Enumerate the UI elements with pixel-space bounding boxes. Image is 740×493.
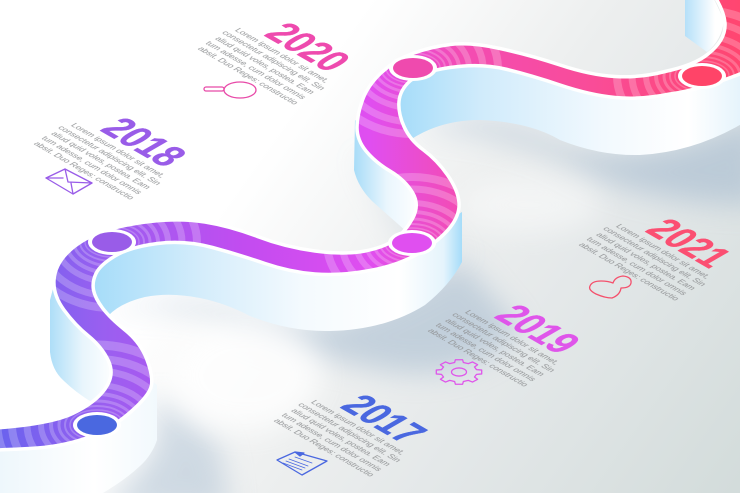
- body text 2018: absit. Duo Reges: constructio: [31, 140, 137, 201]
- body text 2019: [424, 306, 567, 389]
- wall: inner curve below 2018: [50, 285, 116, 403]
- body text 2017: tum adesse, cum dolor omnis: [279, 411, 385, 473]
- body text 2021: consectetur adipiscing elit. Sin: [601, 225, 709, 288]
- node 2017: [73, 412, 121, 438]
- wall: front left section: [0, 380, 157, 493]
- icon: document: [277, 452, 327, 475]
- body text 2017: [270, 396, 413, 479]
- node 2019: [388, 230, 436, 256]
- year 2018: 2018: [91, 111, 197, 173]
- icon: magnifier: [204, 82, 256, 98]
- icon: person: [590, 276, 631, 298]
- icon: gear: [436, 360, 482, 384]
- body text 2017: absit. Duo Reges: constructio: [271, 417, 377, 478]
- wall: inner curve below 2020: [354, 120, 422, 232]
- body text 2017: aliud quid voles, postea. Eam: [289, 407, 394, 468]
- body text 2019: consectetur adipiscing elit. Sin: [450, 311, 558, 374]
- body text 2018: tum adesse, cum dolor omnis: [39, 134, 145, 196]
- milestone 2017 text: [270, 375, 448, 479]
- body text 2021: aliud quid voles, postea. Eam: [594, 231, 699, 292]
- body text 2021: absit. Duo Reges: constructio: [576, 241, 682, 302]
- floor shadows: [100, 115, 740, 493]
- body text 2021: tum adesse, cum dolor omnis: [584, 235, 690, 297]
- body text 2018: consectetur adipiscing elit. Sin: [56, 124, 164, 187]
- body text 2017: Lorem ipsum dolor sit amet,: [309, 398, 408, 456]
- body text 2018: aliud quid voles, postea. Eam: [49, 130, 154, 191]
- body text 2019: tum adesse, cum dolor omnis: [433, 321, 539, 383]
- icon: envelope: [46, 169, 92, 194]
- body text 2020: consectetur adipiscing elit. Sin: [220, 29, 328, 92]
- body text 2021: Lorem ipsum dolor sit amet,: [614, 222, 713, 280]
- node 2020: [389, 55, 437, 81]
- node 2021: [678, 63, 726, 89]
- body text 2020: aliud quid voles, postea. Eam: [213, 35, 318, 96]
- wall: under 2020 to 2021 section: [385, 52, 740, 155]
- body text 2019: Lorem ipsum dolor sit amet,: [463, 308, 562, 366]
- milestone 2021 text: [575, 199, 740, 303]
- body text 2018: Lorem ipsum dolor sit amet,: [69, 121, 168, 179]
- body text 2021: [575, 220, 718, 303]
- body text 2019: absit. Duo Reges: constructio: [425, 327, 531, 388]
- body text 2019: aliud quid voles, postea. Eam: [443, 317, 548, 378]
- year 2017: 2017: [331, 388, 437, 450]
- milestone 2019 text: [424, 285, 602, 389]
- body text 2017: consectetur adipiscing elit. Sin: [296, 401, 404, 464]
- body text 2020: Lorem ipsum dolor sit amet,: [233, 26, 332, 84]
- body text 2020: tum adesse, cum dolor omnis: [203, 39, 309, 101]
- wall: top right: [685, 0, 724, 52]
- body text 2018: [30, 119, 173, 202]
- year 2019: 2019: [485, 298, 591, 360]
- milestone 2020 text: [194, 3, 372, 107]
- milestone 2018 text: [30, 98, 208, 202]
- node 2018: [88, 229, 136, 255]
- wall: under 2018 to 2019 section: [85, 212, 462, 331]
- year 2020: 2020: [255, 16, 361, 78]
- body text 2020: [194, 24, 337, 107]
- body text 2020: absit. Duo Reges: constructio: [195, 45, 301, 106]
